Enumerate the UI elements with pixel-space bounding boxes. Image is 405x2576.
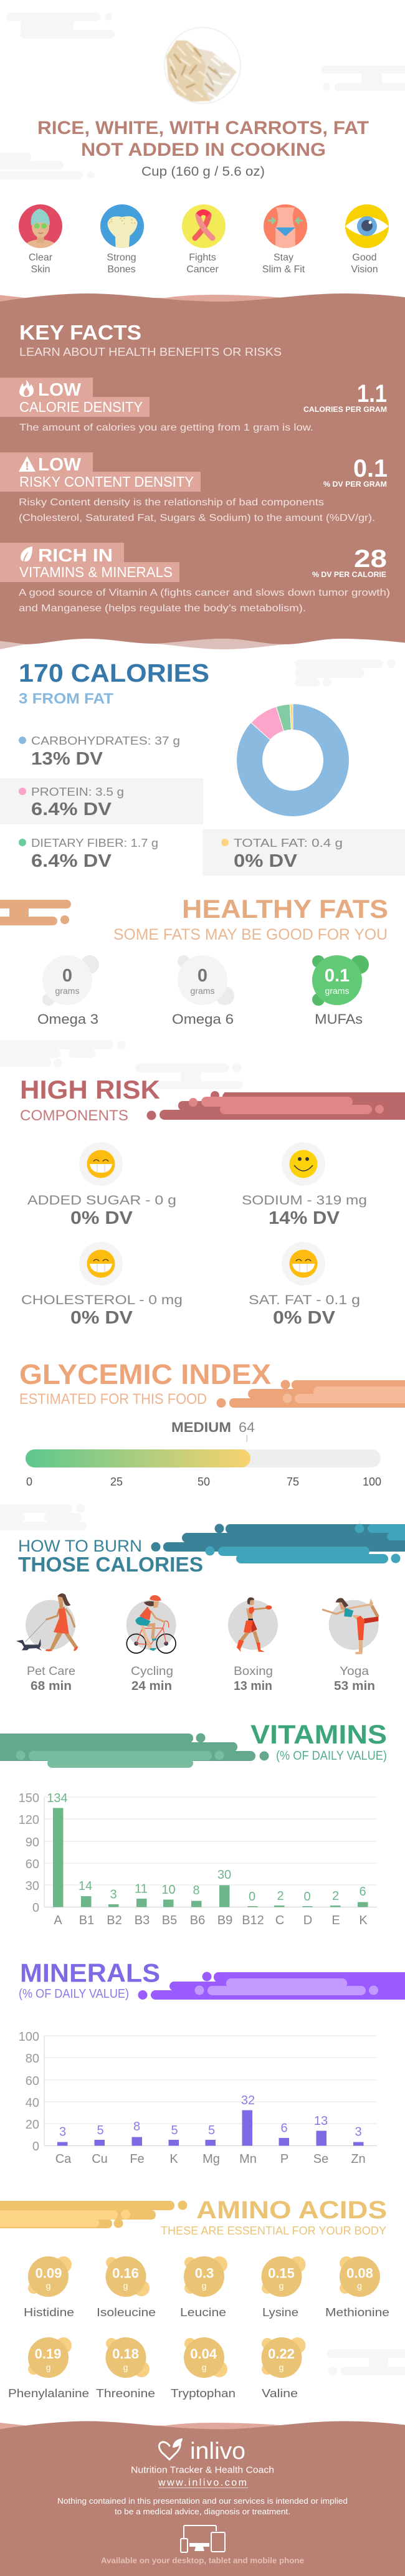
gauge bar [26,1449,381,1467]
bar chart: vitamins: A [54,1914,62,1927]
legend: total fat: 0% DV [234,851,298,871]
amino acid: valine [262,2337,305,2400]
amino acid: isoleucine [97,2256,156,2319]
bar chart: minerals: 5 [208,2124,215,2137]
activity: cycling: 24 min [131,1679,172,1693]
heading: amino acids: THESE ARE ESSENTIAL FOR YOUR BODY [161,2224,386,2237]
fact: risky content density: 0.1 [353,455,388,482]
amino acid: lysine: Lysine [262,2306,298,2319]
amino acid: phenylalanine: Phenylalanine [8,2387,89,2400]
bar chart: vitamins: 14 [79,1879,92,1893]
bar chart: vitamins: E [331,1914,340,1927]
heading: key facts: LEARN ABOUT HEALTH BENEFITS OR RISKS [19,346,282,358]
gauge label [171,1419,255,1442]
item: omega 3: 0 [62,966,72,986]
label: fights cancer: Fights [189,252,216,263]
amino acid: leucine [180,2256,227,2319]
icon: clear skin [19,204,62,248]
fact: calorie density: CALORIES PER GRAM [303,405,387,414]
heading: how to burn those calories [18,1537,203,1576]
fact: rich in vitamins and minerals: % DV PER CALORIE [312,570,386,579]
bar chart: minerals: Mg [202,2152,220,2166]
gauge scale: 75 [287,1476,299,1488]
activity: pet care: 68 min [31,1679,72,1693]
amino acid: tryptophan [171,2337,236,2400]
panel: key facts [0,293,405,649]
amino acid: histidine: Histidine [24,2306,74,2319]
item: mufas: grams [325,986,349,996]
bar chart: vitamins: 0 [249,1890,255,1904]
tagline: Nutrition Tracker & Health Coach [131,2465,274,2475]
heading: glycemic index: GLYCEMIC INDEX [19,1358,271,1390]
bar chart: vitamins: 2 [277,1889,284,1903]
heading: healthy fats [113,894,388,943]
amino acid: histidine: 0.09 [36,2266,62,2281]
logo: inlivo [159,2438,245,2464]
gauge scale [26,1476,381,1488]
activity: pet care [16,1593,79,1693]
heading: high risk: COMPONENTS [20,1107,128,1124]
panel: vitamins [0,1720,387,1927]
legend: carbohydrates: 13% DV [31,749,103,769]
fact: risky content density: LOW [38,455,82,475]
item: sodium [242,1142,367,1228]
item: added sugar: 0% DV [70,1208,133,1228]
bar chart: vitamins: 8 [193,1884,200,1897]
bar chart: vitamins: K [359,1914,368,1927]
icon: strong bones [100,204,144,249]
amino acid: phenylalanine: 0.19 [35,2346,61,2362]
amino acid: histidine: g [46,2281,50,2291]
amino acid: tryptophan: g [202,2362,206,2372]
donut chart [249,704,336,804]
fact: risky content density: (Cholesterol, Saturated Fat, Sugars & Sodium) to the amount (%DV/gr). [19,513,375,523]
bar chart: minerals: 32 [241,2094,255,2107]
amino acid: isoleucine: g [123,2281,128,2291]
fact: calorie density: 1.1 [357,380,387,408]
item: saturated fat [249,1242,360,1328]
fact: rich in vitamins and minerals: 28 [354,545,387,573]
item: saturated fat: 0% DV [273,1308,336,1328]
heading: glycemic index [19,1358,271,1408]
heading: healthy fats: HEALTHY FATS [182,894,388,923]
item: omega 6 [172,955,234,1027]
item: sodium: SODIUM - 319 mg [242,1193,367,1208]
bar chart: vitamins [19,1791,377,1927]
heading: minerals: (% OF DAILY VALUE) [19,1987,129,2001]
amino acid: histidine [24,2256,74,2319]
heading: minerals [19,1958,160,2001]
item: added sugar: ADDED SUGAR - 0 g [27,1193,176,1208]
amino acid: valine: 0.22 [268,2346,295,2362]
fact: calorie density: CALORIE DENSITY [19,399,143,415]
amino acid: leucine: Leucine [180,2306,226,2319]
label: stay slim: Stay [274,252,293,263]
item: omega 3: grams [55,986,79,996]
label: good vision: Vision [351,264,378,275]
legend: protein [0,778,203,824]
panel: amino acids [0,2197,389,2400]
activity: boxing: 13 min [234,1679,272,1693]
amino acid: methionine: 0.08 [346,2266,373,2281]
icon: fights cancer [182,204,226,248]
activity: yoga: 53 min [334,1679,375,1693]
item: mufas: 0.1 [325,966,350,986]
panel: how to burn calories [16,1524,405,1693]
disclaimer: Nothing contained in this presentation and our services is intended or implied [57,2497,348,2506]
panel: footer [0,2421,405,2576]
legend: protein: 6.4% DV [31,799,112,819]
title: RICE, WHITE, WITH CARROTS, FAT [37,118,369,138]
amino acid: isoleucine: 0.16 [112,2266,139,2281]
label: stay slim: Slim & Fit [262,264,305,275]
heading: key facts: KEY FACTS [19,321,141,344]
legend: dietary fiber: DIETARY FIBER: 1.7 g [31,837,158,849]
bar chart: vitamins: 120 [19,1813,39,1827]
gauge scale: 0 [26,1476,32,1488]
bar chart: vitamins: C [275,1914,284,1927]
bar chart: vitamins: 10 [161,1883,176,1897]
fact: rich in vitamins and minerals [0,543,390,614]
gauge scale: 50 [198,1476,210,1488]
amino acid: methionine: Methionine [325,2306,389,2319]
item: mufas [312,955,369,1027]
amino acid: phenylalanine: g [46,2362,50,2372]
label: strong bones: Bones [107,264,136,275]
heading: vitamins: (% OF DAILY VALUE) [276,1749,387,1763]
amino acid: lysine: 0.15 [268,2266,295,2281]
fact: calorie density: LOW [38,380,82,400]
panel: glycemic index [19,1358,405,1488]
bar chart: minerals: 20 [26,2118,39,2132]
label: strong bones [107,252,136,275]
amino acid: leucine: 0.3 [195,2266,214,2281]
amino acid: leucine: g [202,2281,206,2291]
amino acid: tryptophan: Tryptophan [171,2387,236,2400]
bar chart: minerals: 100 [19,2030,39,2044]
panel: high risk [20,1075,405,1328]
fact: rich in vitamins and minerals: VITAMINS & MINERALS [19,564,173,580]
bar chart: minerals: 80 [26,2052,39,2066]
heading: amino acids: AMINO ACIDS [196,2197,387,2224]
amino acid: tryptophan: 0.04 [190,2346,217,2362]
item: omega 6: Omega 6 [172,1011,234,1027]
activity: cycling: Cycling [131,1665,173,1678]
gauge scale: 25 [110,1476,123,1488]
fact: risky content density [0,452,388,523]
website: www.inlivo.com [158,2478,247,2488]
heading: 170 calories [19,659,209,707]
heading: how to burn those calories: THOSE CALORIES [18,1553,203,1576]
bar chart: minerals: Cu [92,2152,108,2166]
panel: healthy fats [0,894,388,1027]
legend: protein: PROTEIN: 3.5 g [31,786,124,798]
icon: stay slim [264,204,307,249]
heading: vitamins: VITAMINS [250,1720,387,1750]
label: stay slim [262,252,305,275]
bar chart: minerals: 3 [59,2125,66,2139]
amino acid: threonine: Threonine [96,2387,155,2400]
fact: risky content density: % DV PER GRAM [323,480,387,489]
heading: vitamins [250,1720,387,1763]
amino acid: methionine: g [357,2281,362,2291]
item: saturated fat: SAT. FAT - 0.1 g [249,1293,360,1307]
bar chart: vitamins: 30 [217,1868,231,1882]
bar chart: vitamins: 3 [110,1888,117,1902]
item: mufas: MUFAs [315,1011,363,1027]
bar chart: vitamins: B6 [190,1914,205,1927]
bar chart: minerals: 0 [32,2140,39,2154]
label: strong bones: Strong [107,252,136,263]
item: added sugar [27,1142,176,1228]
bar chart: vitamins: B2 [107,1914,122,1927]
amino acid: valine: g [279,2362,284,2372]
label: clear skin: Skin [31,264,50,275]
bar chart: minerals: 8 [133,2120,140,2134]
item: omega 3: Omega 3 [37,1011,98,1027]
bar chart: minerals [19,2030,377,2166]
bar chart: vitamins: B9 [217,1914,232,1927]
heading: amino acids [161,2197,387,2237]
heading: 170 calories: 170 CALORIES [19,659,209,687]
amino acid: valine: Valine [262,2387,298,2400]
legend: dietary fiber [19,837,158,871]
bar chart: vitamins: B5 [162,1914,177,1927]
legend: total fat [202,829,405,875]
item: cholesterol: CHOLESTEROL - 0 mg [21,1293,183,1307]
amino acid: phenylalanine [8,2337,89,2400]
label: fights cancer [186,252,219,275]
activity: pet care: Pet Care [27,1665,75,1678]
bar chart: vitamins: B3 [135,1914,150,1927]
bar chart: minerals: 3 [355,2125,362,2139]
bar chart: vitamins: 0 [303,1890,311,1904]
gauge label: 64 [239,1419,255,1435]
icon: warning triangle [19,456,36,472]
bar chart: minerals: Fe [130,2152,145,2166]
fact: rich in vitamins and minerals: RICH IN [38,546,113,566]
panel: calories [0,659,405,875]
bar chart: minerals: 13 [314,2114,328,2128]
activity: cycling [126,1595,176,1693]
legend: carbohydrates [19,735,180,769]
heading: healthy fats: SOME FATS MAY BE GOOD FOR YOU [113,926,388,943]
bar chart: vitamins: D [303,1914,312,1927]
bar chart: vitamins: 0 [32,1901,39,1915]
availability note: Available on your desktop, tablet and mobile phone [101,2556,304,2565]
bar chart: vitamins: 2 [332,1889,339,1903]
amino acid: threonine: g [123,2362,128,2372]
activity: boxing [228,1597,278,1693]
benefit icons row [19,204,389,275]
bar chart: minerals: 40 [26,2096,39,2110]
heading: high risk: HIGH RISK [20,1075,160,1104]
bar chart: minerals: Zn [351,2152,366,2166]
activity: yoga: Yoga [340,1665,369,1678]
legend: carbohydrates: CARBOHYDRATES: 37 g [31,735,180,747]
heading: glycemic index: ESTIMATED FOR THIS FOOD [19,1391,207,1408]
item: omega 6: grams [191,986,214,996]
bar chart: vitamins: 11 [135,1882,148,1896]
bar chart: minerals: Mn [239,2152,257,2166]
label: clear skin [29,252,53,275]
item: sodium: 14% DV [269,1208,340,1228]
logo: inlivo: inlivo [190,2438,245,2464]
disclaimer [57,2497,348,2516]
heading: minerals: MINERALS [20,1958,160,1988]
bar chart: minerals: 60 [26,2074,39,2088]
label: good vision [351,252,378,275]
fact: rich in vitamins and minerals: A good source of Vitamin A (fights cancer and slows down tumor growth) [19,588,390,598]
gauge label: MEDIUM [171,1419,231,1435]
disclaimer: to be a medical advice, diagnosis or treatment. [115,2507,290,2516]
title: NOT ADDED IN COOKING [81,140,326,160]
amino acid: threonine [96,2337,155,2400]
bar chart: minerals: Ca [55,2152,72,2166]
label: clear skin: Clear [29,252,53,263]
heading: how to burn those calories: HOW TO BURN [18,1537,142,1555]
title [37,118,369,160]
panel: minerals [19,1958,405,2166]
label: fights cancer: Cancer [186,264,219,275]
bar chart: vitamins: 60 [26,1858,39,1871]
bar chart: vitamins: 30 [26,1879,39,1893]
icon: good vision [345,204,389,248]
bar chart: vitamins: 90 [26,1836,39,1849]
bar chart: vitamins: B1 [79,1914,94,1927]
fact: rich in vitamins and minerals: and Manganese (helps regulate the body’s metabolism). [19,603,306,614]
bar chart: vitamins: 150 [19,1791,39,1805]
fact: calorie density: The amount of calories you are getting from 1 gram is low. [19,422,313,433]
bar chart: minerals: P [280,2152,288,2166]
label: good vision: Good [352,252,377,263]
amino acid: methionine [325,2256,389,2319]
icon: flame [19,380,34,397]
amino acid: lysine [262,2256,305,2319]
item: omega 6: 0 [198,966,207,986]
fact: risky content density: RISKY CONTENT DENSITY [19,474,194,490]
amino acid: lysine: g [279,2281,284,2291]
serving size: Cup (160 g / 5.6 oz) [141,165,265,179]
item: cholesterol: 0% DV [70,1308,133,1328]
bar chart: minerals: 5 [171,2124,178,2137]
legend: total fat: TOTAL FAT: 0.4 g [234,837,343,849]
heading: 170 calories: 3 FROM FAT [19,690,113,707]
item: cholesterol [21,1242,183,1328]
bar chart: minerals: 6 [280,2121,288,2135]
bar chart: vitamins: 134 [47,1791,68,1805]
fact: calorie density [0,378,387,433]
activity: boxing: Boxing [234,1665,273,1678]
bar chart: vitamins: 6 [359,1885,366,1899]
amino acid: isoleucine: Isoleucine [97,2306,156,2319]
activity: yoga [323,1598,379,1693]
item: omega 3 [37,955,99,1027]
heading: high risk [20,1075,160,1124]
bar chart: vitamins: B12 [242,1914,264,1927]
icon: leaf [21,546,32,561]
legend: dietary fiber: 6.4% DV [31,851,112,871]
fact: risky content density: Risky Content density is the relationship of bad components [19,497,324,508]
amino acid: threonine: 0.18 [112,2346,139,2362]
bar chart: minerals: K [169,2152,178,2166]
heading: key facts [19,321,282,358]
gauge scale: 100 [363,1476,381,1488]
icon: devices [181,2526,225,2552]
bar chart: minerals: 5 [97,2124,104,2137]
bar chart: minerals: Se [313,2152,328,2166]
food image: rice [164,27,241,103]
